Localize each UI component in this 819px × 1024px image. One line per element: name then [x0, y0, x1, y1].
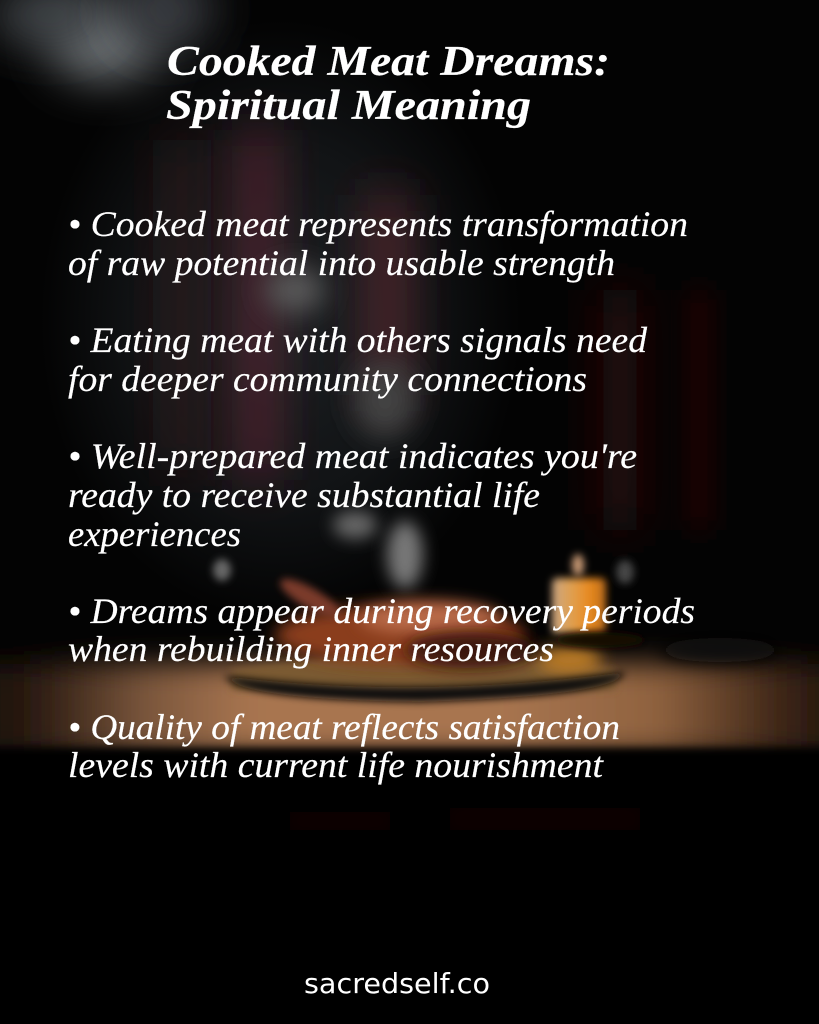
bullet: quality [68, 707, 620, 785]
bullet: readiness [68, 436, 637, 554]
table surface [0, 664, 819, 1024]
bullet: community: • Eating meat with others signals need [68, 320, 648, 360]
side dishes [290, 638, 780, 830]
bullet: community [68, 320, 648, 399]
bullet: readiness: • Well-prepared meat indicates you're [68, 436, 637, 476]
bullet: recovery: • Dreams appear during recovery periods [68, 591, 695, 631]
title: Cooked Meat Dreams: [167, 39, 610, 85]
bullet: quality: levels with current life nourishment [68, 745, 604, 785]
bullet: recovery: when rebuilding inner resources [68, 629, 554, 669]
title: Spiritual Meaning [166, 83, 531, 129]
footer: site name: sacredself.co [304, 967, 490, 1000]
bullet: transformation: of raw potential into usable strength [68, 243, 615, 283]
bullet: transformation [68, 204, 688, 283]
bullet: readiness: experiences [68, 514, 241, 554]
plate with roast meat [224, 572, 625, 702]
title [166, 39, 610, 129]
bullet: recovery [68, 591, 695, 669]
bullet: community: for deeper community connections [68, 359, 587, 399]
bullet: readiness: ready to receive substantial life [68, 475, 540, 515]
candle [552, 554, 645, 648]
bullet: transformation: • Cooked meat represents transformation [68, 204, 688, 244]
bullet: quality: • Quality of meat reflects satisfaction [68, 707, 620, 747]
